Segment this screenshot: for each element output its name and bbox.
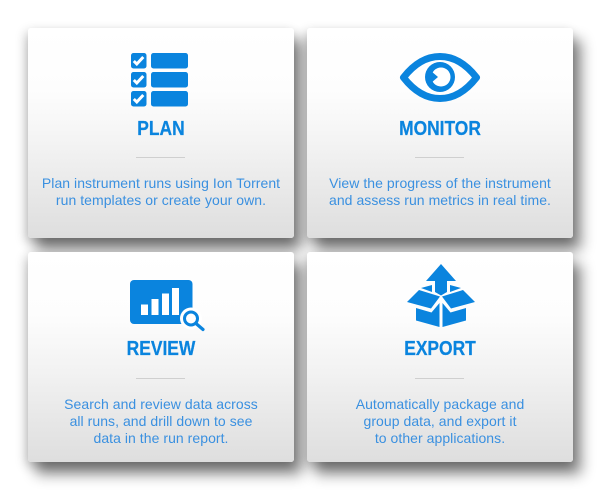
icon: open box with arrow — [407, 264, 475, 327]
text: review description — [64, 396, 258, 446]
icon: eye — [400, 53, 480, 102]
text: review description: all runs, and drill down to see — [70, 413, 252, 429]
text: monitor description: and assess run metrics in real time. — [329, 192, 551, 208]
heading: review: REVIEW — [127, 338, 195, 360]
text: plan description: Plan instrument runs using Ion Torrent — [42, 175, 280, 191]
text: review description: data in the run report. — [93, 430, 228, 446]
heading: monitor: MONITOR — [399, 118, 481, 140]
panel: monitor — [307, 28, 573, 238]
panel: review — [28, 252, 294, 462]
panel: export — [307, 252, 573, 462]
text: plan description — [42, 175, 280, 208]
text: export description: to other applications. — [375, 430, 505, 446]
text: review description: Search and review data across — [64, 396, 258, 412]
text: plan description: run templates or create your own. — [56, 192, 266, 208]
icon: bar chart with magnifier — [130, 280, 205, 332]
text: export description: Automatically package and — [356, 396, 524, 412]
heading: export: EXPORT — [404, 338, 476, 360]
text: export description — [356, 396, 524, 446]
heading: plan: PLAN — [137, 118, 185, 140]
text: monitor description — [329, 175, 551, 208]
text: export description: group data, and export it — [363, 413, 517, 429]
panel: plan — [28, 28, 294, 238]
icon: checklist — [131, 53, 188, 106]
text: monitor description: View the progress of the instrument — [329, 175, 551, 191]
